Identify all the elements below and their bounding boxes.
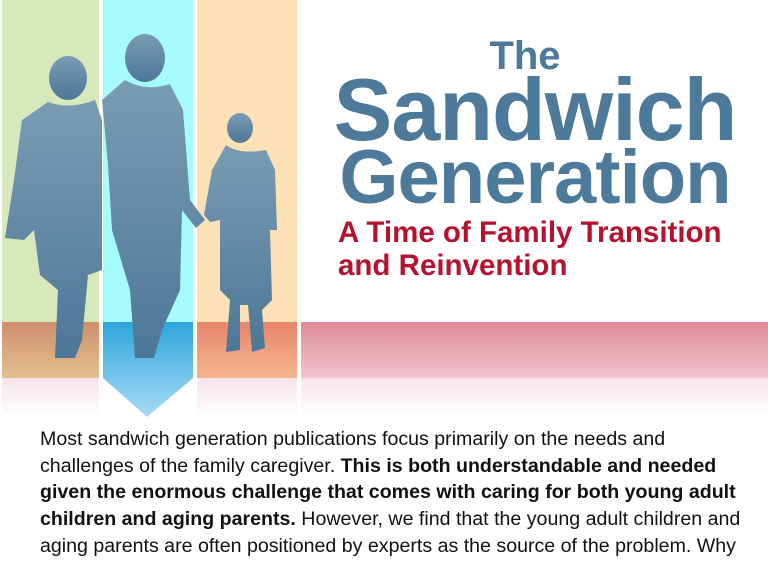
column: cyan xyxy=(103,0,193,322)
title: Generation xyxy=(339,135,731,220)
body text: aging parents are often positioned by experts as the source of the problem. Why xyxy=(40,535,736,557)
subtitle xyxy=(338,216,722,282)
subtitle: and Reinvention xyxy=(338,249,567,282)
banner graphic xyxy=(2,0,768,417)
body text xyxy=(40,428,740,557)
body text: Most sandwich generation publications focus primarily on the needs and xyxy=(40,428,665,450)
title xyxy=(334,34,736,220)
pink band xyxy=(301,322,768,378)
column: green xyxy=(2,0,99,322)
arrow xyxy=(103,322,193,417)
title: The xyxy=(489,34,561,78)
body text: challenges of the family caregiver. This is both understandable and needed xyxy=(40,455,716,477)
title: Sandwich xyxy=(334,60,736,159)
column: orange xyxy=(197,0,297,322)
silhouettes: family xyxy=(5,34,277,358)
body text: given the enormous challenge that comes with caring for both young adult xyxy=(40,481,736,503)
subtitle: A Time of Family Transition xyxy=(338,216,722,249)
body text: children and aging parents. However, we find that the young adult children and xyxy=(40,508,740,530)
